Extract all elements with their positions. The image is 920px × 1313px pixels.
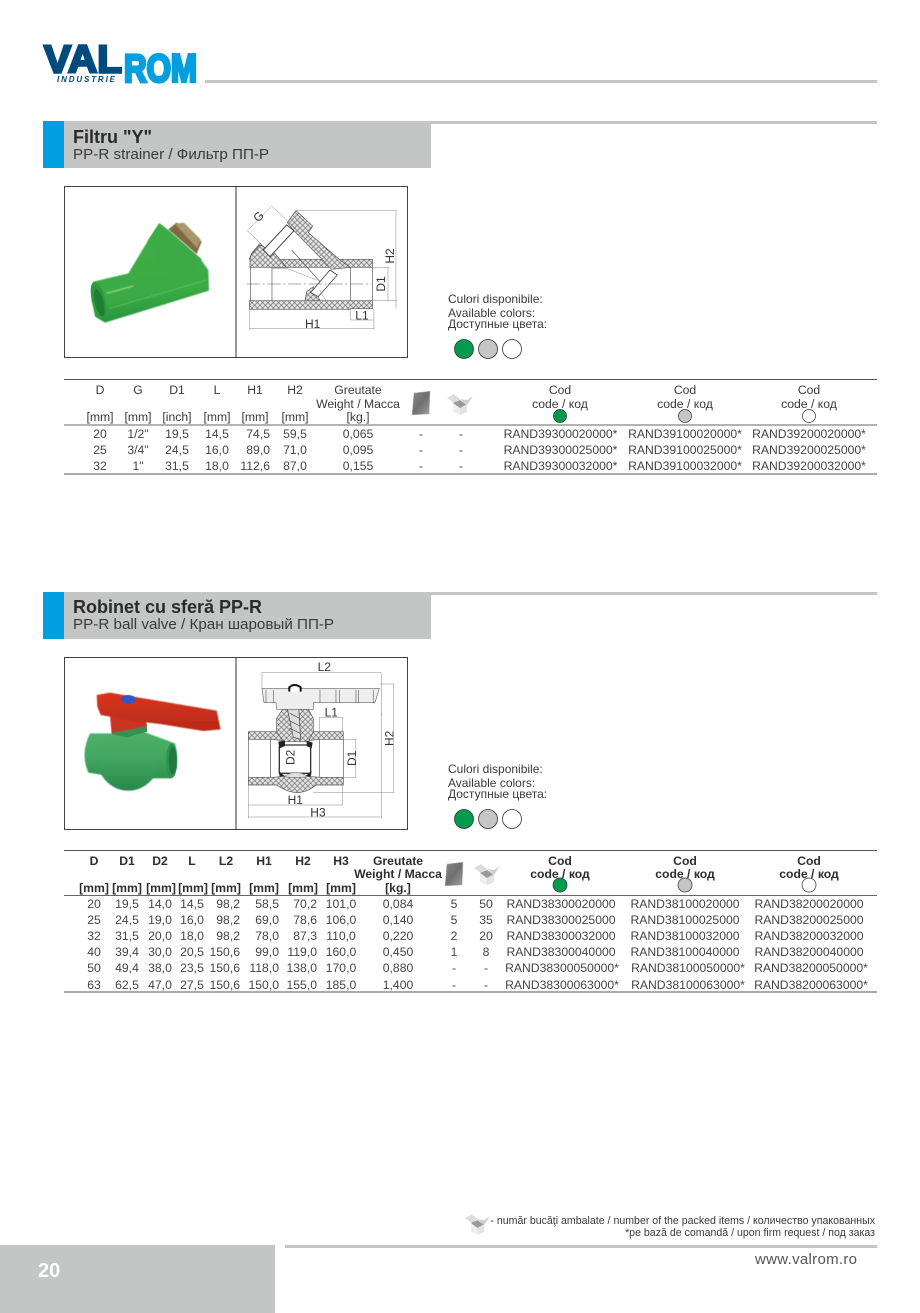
table rows: Y strainer: 19,5	[165, 427, 189, 441]
table rows: ball valve: 69,0	[255, 913, 279, 927]
table header: Y strainer: H1	[247, 383, 263, 397]
table header: ball valve: H3	[333, 854, 349, 868]
section header: Filtru Y	[43, 121, 877, 168]
available colors: Y strainer	[448, 292, 547, 358]
table rows: Y strainer: RAND39200020000*	[752, 427, 866, 441]
table rows: ball valve: -	[452, 978, 456, 992]
table rows: ball valve: 8	[483, 945, 490, 959]
table rows: Y strainer: 18,0	[205, 459, 229, 473]
logo: Valrom Industrie: VAL	[44, 38, 122, 82]
table header: ball valve: H2	[295, 854, 311, 868]
diagram: ball valve cross-section: H2	[382, 730, 396, 746]
table header: Y strainer: [mm]	[241, 410, 269, 424]
available colors: Y strainer: Available colors:	[448, 306, 535, 320]
table header: ball valve: H1	[256, 854, 272, 868]
footnote with box icon: *pe bază de comandă / upon firm request / под заказ	[625, 1227, 875, 1239]
table rows: ball valve: 0,450	[383, 945, 413, 959]
table rows: ball valve: 5	[451, 913, 458, 927]
table header: Y strainer: Cod	[674, 383, 696, 397]
table rows: ball valve: RAND38200020000	[754, 897, 864, 911]
table rows: ball valve: 63	[87, 978, 101, 992]
table rows: ball valve: 32	[87, 929, 101, 943]
table rows: Y strainer: RAND39300025000*	[504, 443, 618, 457]
table rows: ball valve: 78,0	[255, 929, 279, 943]
table rows: ball valve: RAND38300050000*	[505, 961, 619, 975]
logo: Valrom Industrie	[44, 38, 197, 90]
table rows: ball valve: RAND38200025000	[754, 913, 864, 927]
table rows: ball valve: 27,5	[180, 978, 204, 992]
table rows: ball valve: RAND38200063000*	[754, 978, 868, 992]
diagram: Y strainer cross-section: H1	[305, 317, 321, 331]
table rows: Y strainer: -	[459, 443, 463, 457]
diagram: Y strainer cross-section: G	[250, 208, 267, 225]
table rows: ball valve: 47,0	[148, 978, 172, 992]
table rows: Y strainer: 32	[93, 459, 107, 473]
table rows: Y strainer: RAND39200032000*	[752, 459, 866, 473]
table header: ball valve: L2	[219, 854, 233, 868]
table rows: ball valve: 0,220	[383, 929, 413, 943]
table header: Y strainer: G	[133, 383, 143, 397]
available colors: ball valve: Доступные цвета:	[448, 787, 547, 801]
table rows: ball valve: 40	[87, 945, 101, 959]
table header: ball valve: [mm]	[288, 881, 318, 895]
table header: ball valve: Cod	[797, 854, 821, 868]
table rows: ball valve: 98,2	[216, 897, 240, 911]
table rows: ball valve: 49,4	[115, 961, 139, 975]
table rows: ball valve: 106,0	[326, 913, 356, 927]
table header: ball valve: [mm]	[326, 881, 356, 895]
section header: Filtru Y: Filtru "Y"	[73, 127, 152, 147]
table header: ball valve: [kg.]	[385, 881, 411, 895]
table rows: ball valve: 99,0	[255, 945, 279, 959]
product frame: Y strainer	[64, 186, 408, 358]
table header: ball valve: [mm]	[249, 881, 279, 895]
table rows: Y strainer: 89,0	[246, 443, 270, 457]
table rows: ball valve: 23,5	[180, 961, 204, 975]
table header: ball valve: D2	[152, 854, 168, 868]
table rows: ball valve: 0,084	[383, 897, 413, 911]
table rows: ball valve: RAND38100025000	[630, 913, 740, 927]
table header: ball valve: code / код	[779, 867, 839, 881]
table: ball valve	[64, 850, 877, 992]
table rows: Y strainer: 20	[93, 427, 107, 441]
available colors: ball valve: Culori disponibile:	[448, 762, 543, 776]
section header: ball valve: PP-R ball valve / Кран шаровый ПП-Р	[73, 616, 334, 633]
section header: ball valve	[43, 592, 877, 639]
table header: Y strainer: H2	[287, 383, 303, 397]
table rows: ball valve: RAND38100050000*	[631, 961, 745, 975]
table rows: Y strainer: RAND39100025000*	[628, 443, 742, 457]
table rows: ball valve: 25	[87, 913, 101, 927]
table header: ball valve: [mm]	[211, 881, 241, 895]
table rows: ball valve: 160,0	[326, 945, 356, 959]
table rows: ball valve: 20	[479, 929, 493, 943]
table rows: ball valve: -	[484, 961, 488, 975]
table rows: Y strainer: -	[459, 459, 463, 473]
table rows: ball valve: 38,0	[148, 961, 172, 975]
table rows: Y strainer: 59,5	[283, 427, 307, 441]
table header: Y strainer: code / код	[657, 397, 713, 411]
table header: ball valve: [mm]	[79, 881, 109, 895]
table rows: ball valve: 150,6	[210, 978, 240, 992]
table rows: ball valve: 155,0	[286, 978, 317, 992]
table header: ball valve: D1	[119, 854, 135, 868]
table header: Y strainer	[86, 383, 837, 424]
table rows: Y strainer: RAND39300020000*	[504, 427, 618, 441]
table header: ball valve: Cod	[673, 854, 697, 868]
table rows: ball valve: 50	[87, 961, 101, 975]
table rows: Y strainer: 25	[93, 443, 107, 457]
table rows: ball valve: 185,0	[326, 978, 356, 992]
website address: www.valrom.ro	[754, 1251, 857, 1268]
table rows: Y strainer: 112,6	[240, 459, 270, 473]
table rows: ball valve: 150,6	[210, 961, 240, 975]
table rows: ball valve: 16,0	[180, 913, 204, 927]
table rows: ball valve: RAND38200040000	[754, 945, 864, 959]
diagram: ball valve cross-section: D2	[284, 749, 298, 765]
diagram: ball valve cross-section: D1	[345, 750, 359, 766]
table header: Y strainer: code / код	[532, 397, 588, 411]
table rows: ball valve: 18,0	[180, 929, 204, 943]
table rows: ball valve: RAND38300032000	[506, 929, 616, 943]
table rows: ball valve: 70,2	[293, 897, 317, 911]
table header: Y strainer: [mm]	[203, 410, 231, 424]
table rows: Y strainer: 1"	[132, 459, 144, 473]
table rows: ball valve: 110,0	[326, 929, 356, 943]
table rows: ball valve: 98,2	[216, 929, 240, 943]
table rows: Y strainer: 87,0	[283, 459, 307, 473]
section header: Filtru Y: PP-R strainer / Фильтр ПП-Р	[73, 146, 269, 163]
table header: ball valve: D	[90, 854, 99, 868]
table rows: Y strainer: 0,155	[343, 459, 373, 473]
footnote with box icon: - număr bucăţi ambalate / number of the packed items / количество упакованных	[490, 1215, 876, 1227]
footnote with box icon	[465, 1214, 876, 1239]
table header: Y strainer: [mm]	[124, 410, 152, 424]
table header: Y strainer: D	[96, 383, 105, 397]
table header: ball valve: [mm]	[112, 881, 142, 895]
diagram: ball valve cross-section: L1	[325, 706, 338, 720]
table rows: ball valve: RAND38100063000*	[631, 978, 745, 992]
diagram: Y strainer cross-section: H2	[383, 248, 397, 264]
table rows: ball valve: 87,3	[293, 929, 317, 943]
table rows: ball valve: 31,5	[115, 929, 139, 943]
table rows: ball valve: RAND38100032000	[630, 929, 740, 943]
table rows: ball valve: 119,0	[287, 945, 317, 959]
table rows: ball valve: 19,5	[115, 897, 139, 911]
logo: Valrom Industrie: ROM	[124, 48, 197, 90]
table header: ball valve: [mm]	[146, 881, 176, 895]
table rows: Y strainer: 74,5	[246, 427, 270, 441]
table header: ball valve: Cod	[548, 854, 572, 868]
section header: ball valve: Robinet cu sferă PP-R	[73, 597, 262, 617]
table rows: Y strainer: 0,065	[343, 427, 373, 441]
table header: Y strainer: D1	[169, 383, 185, 397]
logo: Valrom Industrie: INDUSTRIE	[57, 75, 116, 84]
table rows: ball valve: 35	[479, 913, 493, 927]
table rows: ball valve: 0,140	[383, 913, 413, 927]
table rows: Y strainer: 31,5	[165, 459, 189, 473]
table rows: Y strainer: -	[459, 427, 463, 441]
table rows: Y strainer: -	[419, 427, 423, 441]
table rows: ball valve: 150,0	[248, 978, 279, 992]
table rows: Y strainer: 71,0	[283, 443, 307, 457]
table rows: ball valve: 20,5	[180, 945, 204, 959]
table rows: ball valve: 50	[479, 897, 493, 911]
table rows: Y strainer	[93, 427, 866, 473]
available colors: Y strainer: Culori disponibile:	[448, 292, 543, 306]
table rows: ball valve: RAND38200032000	[754, 929, 864, 943]
table header: Y strainer: Cod	[798, 383, 820, 397]
table header: Y strainer: L	[214, 383, 221, 397]
table rows: ball valve: RAND38100040000	[630, 945, 740, 959]
table rows: ball valve: 24,5	[115, 913, 139, 927]
available colors: ball valve	[448, 762, 547, 828]
diagram: Y strainer cross-section: L1	[355, 308, 369, 322]
diagram: ball valve cross-section: L2	[318, 660, 331, 674]
product frame: ball valve	[64, 657, 408, 830]
table rows: ball valve: -	[452, 961, 456, 975]
table header: ball valve: Greutate	[373, 854, 423, 868]
table rows: ball valve: 98,2	[216, 913, 240, 927]
table: Y strainer	[64, 380, 877, 474]
table rows: ball valve: 150,6	[210, 945, 240, 959]
table rows: Y strainer: -	[419, 459, 423, 473]
diagram: Y strainer cross-section	[247, 206, 397, 331]
photo: green Y strainer	[88, 223, 209, 323]
table rows: ball valve: 101,0	[326, 897, 356, 911]
table rows: ball valve: 1	[451, 945, 458, 959]
table rows: ball valve	[87, 897, 868, 992]
table rows: ball valve: 2	[451, 929, 458, 943]
table rows: ball valve: 1,400	[383, 978, 413, 992]
table header: ball valve: code / код	[530, 867, 590, 881]
table rows: ball valve: 14,5	[180, 897, 204, 911]
table rows: ball valve: 19,0	[148, 913, 172, 927]
table rows: ball valve: 170,0	[326, 961, 356, 975]
footer page number band: 20	[38, 1260, 60, 1282]
available colors: ball valve: Available colors:	[448, 776, 535, 790]
diagram: Y strainer cross-section: D1	[374, 276, 388, 292]
table header: Y strainer: [mm]	[281, 410, 309, 424]
table rows: ball valve: 39,4	[115, 945, 139, 959]
table rows: Y strainer: 3/4"	[127, 443, 149, 457]
table rows: ball valve: 58,5	[255, 897, 279, 911]
table rows: ball valve: RAND38100020000	[630, 897, 740, 911]
table header: Y strainer: Cod	[549, 383, 571, 397]
diagram: ball valve cross-section: H1	[288, 793, 303, 807]
table rows: Y strainer: -	[419, 443, 423, 457]
table header: ball valve	[79, 854, 839, 895]
diagram: ball valve cross-section	[248, 660, 396, 819]
table rows: Y strainer: RAND39200025000*	[752, 443, 866, 457]
table rows: Y strainer: 24,5	[165, 443, 189, 457]
table rows: Y strainer: 1/2"	[127, 427, 149, 441]
table header: Y strainer: code / код	[781, 397, 837, 411]
diagram: ball valve cross-section: H3	[310, 805, 326, 819]
table header: Y strainer: Greutate	[334, 383, 382, 397]
table rows: ball valve: 0,880	[383, 961, 413, 975]
table header: ball valve: L	[188, 854, 196, 868]
available colors: Y strainer: Доступные цвета:	[448, 317, 547, 331]
footer page number band	[0, 1245, 275, 1313]
table header: Y strainer: [mm]	[86, 410, 114, 424]
table rows: ball valve: 30,0	[148, 945, 172, 959]
table rows: Y strainer: RAND39300032000*	[504, 459, 618, 473]
table header: ball valve: Weight / Macca	[354, 867, 442, 881]
table header: Y strainer: [inch]	[162, 410, 192, 424]
table rows: ball valve: 20,0	[148, 929, 172, 943]
table rows: Y strainer: 16,0	[205, 443, 229, 457]
table rows: ball valve: 14,0	[148, 897, 172, 911]
table rows: ball valve: 62,5	[115, 978, 139, 992]
table rows: Y strainer: RAND39100032000*	[628, 459, 742, 473]
table rows: ball valve: RAND38300025000	[506, 913, 616, 927]
table header: ball valve: code / код	[655, 867, 715, 881]
table rows: ball valve: -	[484, 978, 488, 992]
table header: Y strainer: [kg.]	[346, 410, 370, 424]
table rows: ball valve: 118,0	[249, 961, 279, 975]
table rows: ball valve: RAND38200050000*	[754, 961, 868, 975]
table rows: Y strainer: 0,095	[343, 443, 373, 457]
photo: green ball valve with red handle	[85, 693, 221, 791]
table rows: Y strainer: 14,5	[205, 427, 229, 441]
table rows: ball valve: 138,0	[286, 961, 317, 975]
table rows: ball valve: RAND38300040000	[506, 945, 616, 959]
table rows: ball valve: 5	[451, 897, 458, 911]
table header: Y strainer: Weight / Macca	[316, 397, 400, 411]
table header: ball valve: [mm]	[178, 881, 208, 895]
table rows: ball valve: 20	[87, 897, 101, 911]
table rows: Y strainer: RAND39100020000*	[628, 427, 742, 441]
table rows: ball valve: 78,6	[293, 913, 317, 927]
table rows: ball valve: RAND38300063000*	[505, 978, 619, 992]
table rows: ball valve: RAND38300020000	[506, 897, 616, 911]
